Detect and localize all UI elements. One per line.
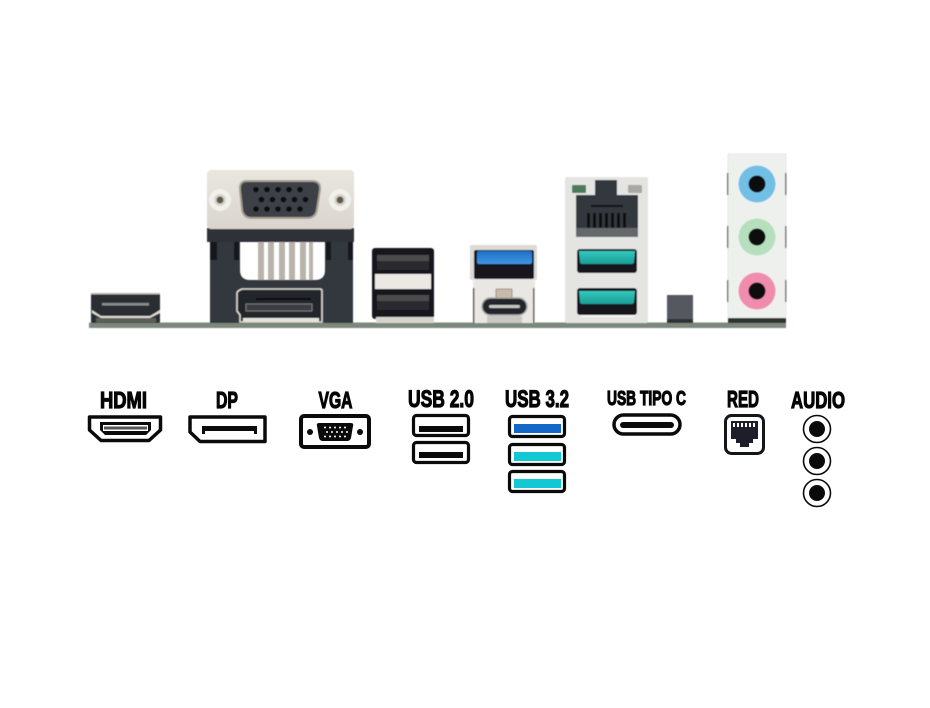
- icon: audio jacks: [804, 416, 830, 506]
- label: VGA: VGA: [318, 387, 352, 413]
- jack green: [738, 218, 776, 256]
- icon: USB-C: [614, 415, 680, 434]
- VGA dark band: [207, 228, 354, 242]
- photo: small component: [667, 295, 693, 323]
- jack pink: [738, 272, 776, 310]
- RJ45 LEDs: [572, 185, 586, 193]
- photo: audio jack block: [727, 154, 786, 323]
- teal USB lower: [577, 288, 637, 315]
- VGA legs and frame: [210, 241, 353, 323]
- RJ45 socket: [576, 180, 638, 228]
- label: DP: DP: [216, 387, 238, 413]
- photo: HDMI port: [91, 293, 160, 323]
- jack blue: [738, 166, 776, 202]
- circuit board strip: [89, 322, 786, 328]
- VGA metal plate: [207, 170, 354, 229]
- label: HDMI: HDMI: [100, 387, 147, 413]
- icon: Ethernet: [726, 416, 764, 454]
- icon: VGA: [301, 416, 369, 447]
- VGA pins: [258, 242, 313, 280]
- photo: VGA and DisplayPort stack: [207, 170, 354, 323]
- photo: Ethernet and USB 3.2 stack: [565, 177, 648, 323]
- label: USB 2.0: USB 2.0: [408, 386, 474, 413]
- DisplayPort socket: [237, 289, 322, 322]
- icon: HDMI: [90, 417, 160, 440]
- motherboard rear I/O photo: [89, 154, 786, 328]
- photo: USB 3.2 and USB-C stack: [470, 245, 537, 323]
- label: RED: RED: [727, 386, 759, 412]
- teal USB upper: [577, 249, 637, 273]
- VGA D-sub socket: [240, 181, 320, 218]
- label: USB TIPO C: USB TIPO C: [607, 388, 686, 410]
- icon: USB 3.2: [510, 416, 564, 492]
- label: AUDIO: AUDIO: [791, 387, 845, 413]
- USB-C socket: [482, 298, 527, 315]
- VGA screws: [209, 189, 231, 211]
- photo: USB 2.0 stack: [372, 248, 434, 323]
- label: USB 3.2: USB 3.2: [505, 386, 569, 413]
- icon: DisplayPort: [190, 417, 265, 442]
- icon: USB 2.0: [414, 416, 468, 462]
